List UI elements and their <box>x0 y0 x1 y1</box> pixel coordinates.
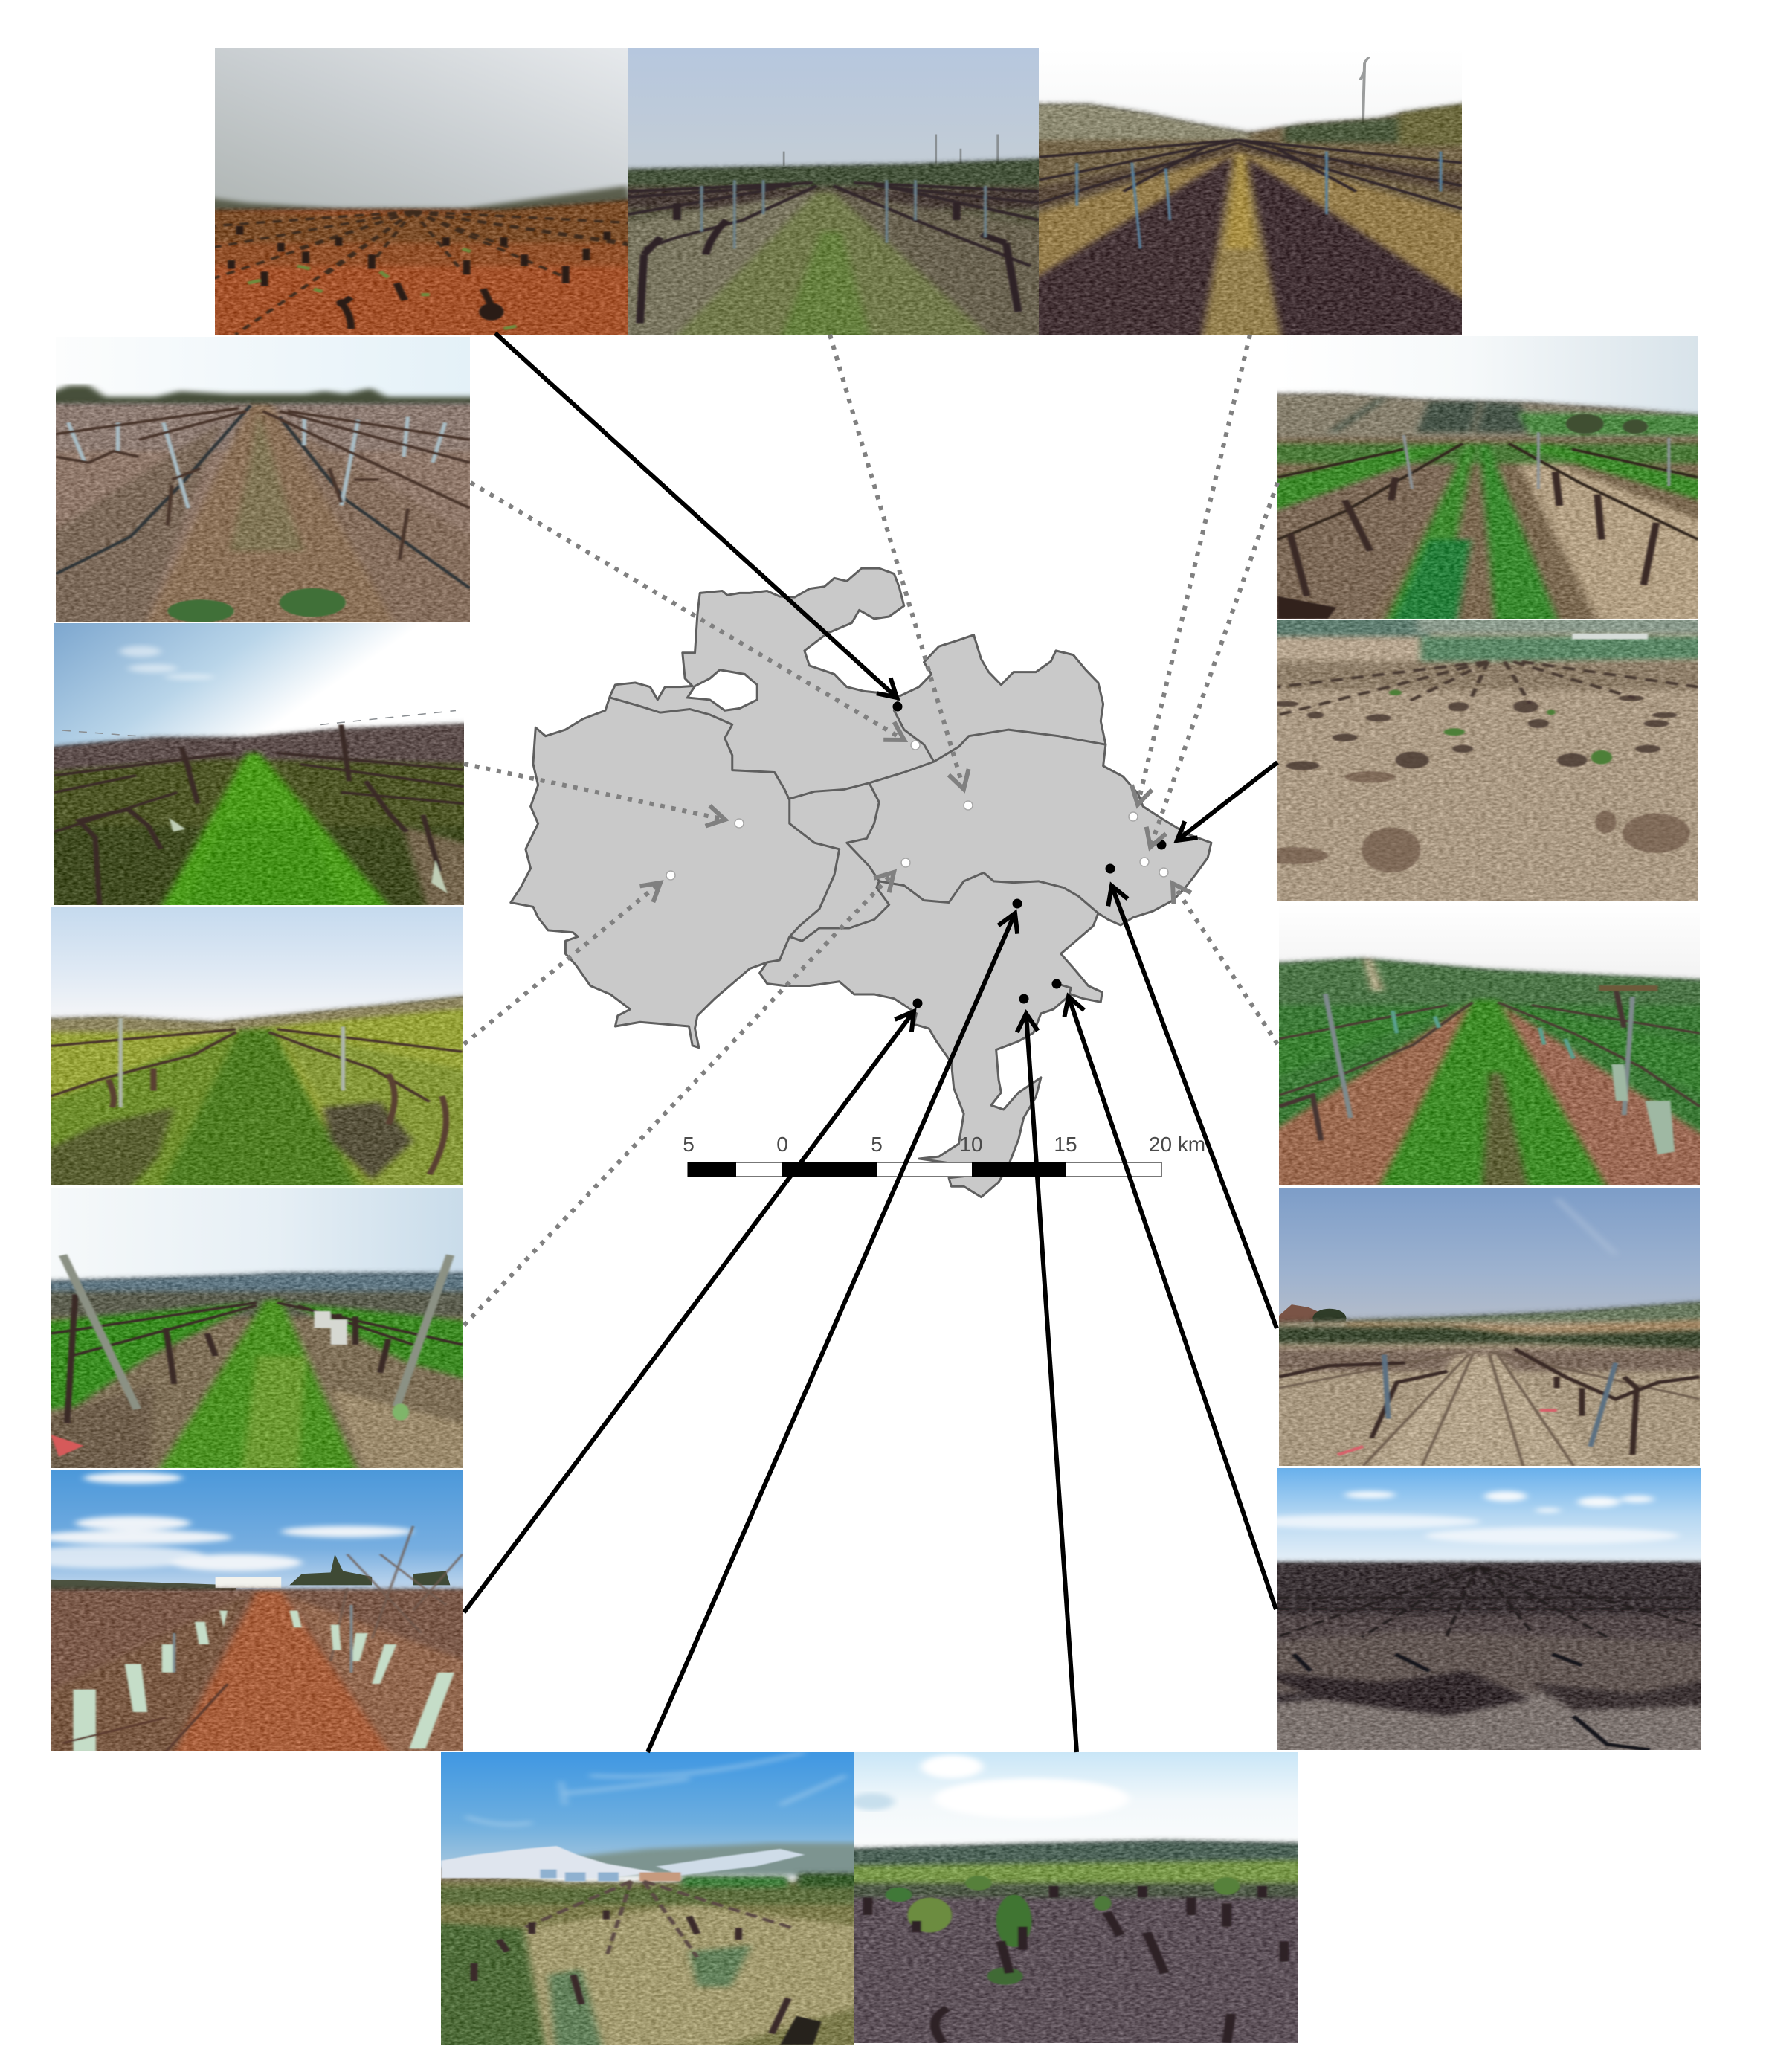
scale bar: 0 <box>776 1133 788 1156</box>
photo: tilled tan soil with pruned stumps, right 2 <box>1257 605 1719 918</box>
photo: green rows on reddish soil, right 3 <box>1258 904 1721 1203</box>
photo: green aisle vineyard, top centre <box>607 48 1060 352</box>
scale bar: 10 <box>959 1133 983 1156</box>
map hole: enclave <box>687 670 757 710</box>
photo: green aisle with angled posts, left 4 <box>30 1188 483 1485</box>
photo: bright green aisle, left 2 <box>33 623 485 922</box>
scale bar <box>683 1133 1205 1177</box>
site markers: white points <box>666 741 1168 880</box>
site markers: black points <box>892 702 1166 1008</box>
photo: green rows with hillside olive groves, right 1 <box>1257 336 1719 636</box>
map: municipalities of the study area <box>511 568 1211 1197</box>
map outline <box>511 568 1211 1197</box>
photo: yellow-green ground cover, left 3 <box>30 907 483 1202</box>
scale bar: 5 <box>683 1133 695 1156</box>
dotted grey arrows: from light-cover photos to white sites <box>464 335 1277 1325</box>
map borders between municipalities <box>610 698 1106 994</box>
photo: blue-grey sky over tan vineyard, right 4 <box>1258 1188 1721 1482</box>
scale bar: 5 <box>871 1133 883 1156</box>
photo: brown vineyard with irrigation hose, left 1 <box>35 337 491 640</box>
solid black arrows: from bare-soil photos to black sites <box>464 333 1277 1752</box>
scale bar: 15 <box>1054 1133 1077 1156</box>
scale bar: 20 km <box>1149 1133 1205 1156</box>
photo: hillside white town and olive field, bottom left <box>420 1752 875 2063</box>
photo: dark and yellow rows with pylon, top right <box>1018 48 1483 352</box>
photo: red soil vineyard, top left <box>174 48 689 352</box>
photo: grey soil with shrubs, bottom right <box>832 1752 1320 2060</box>
photo: dark soil under bright blue sky, right 5 <box>1243 1468 1722 1767</box>
photo: red path with tree guards and farmhouse, left 5 <box>10 1470 483 1769</box>
